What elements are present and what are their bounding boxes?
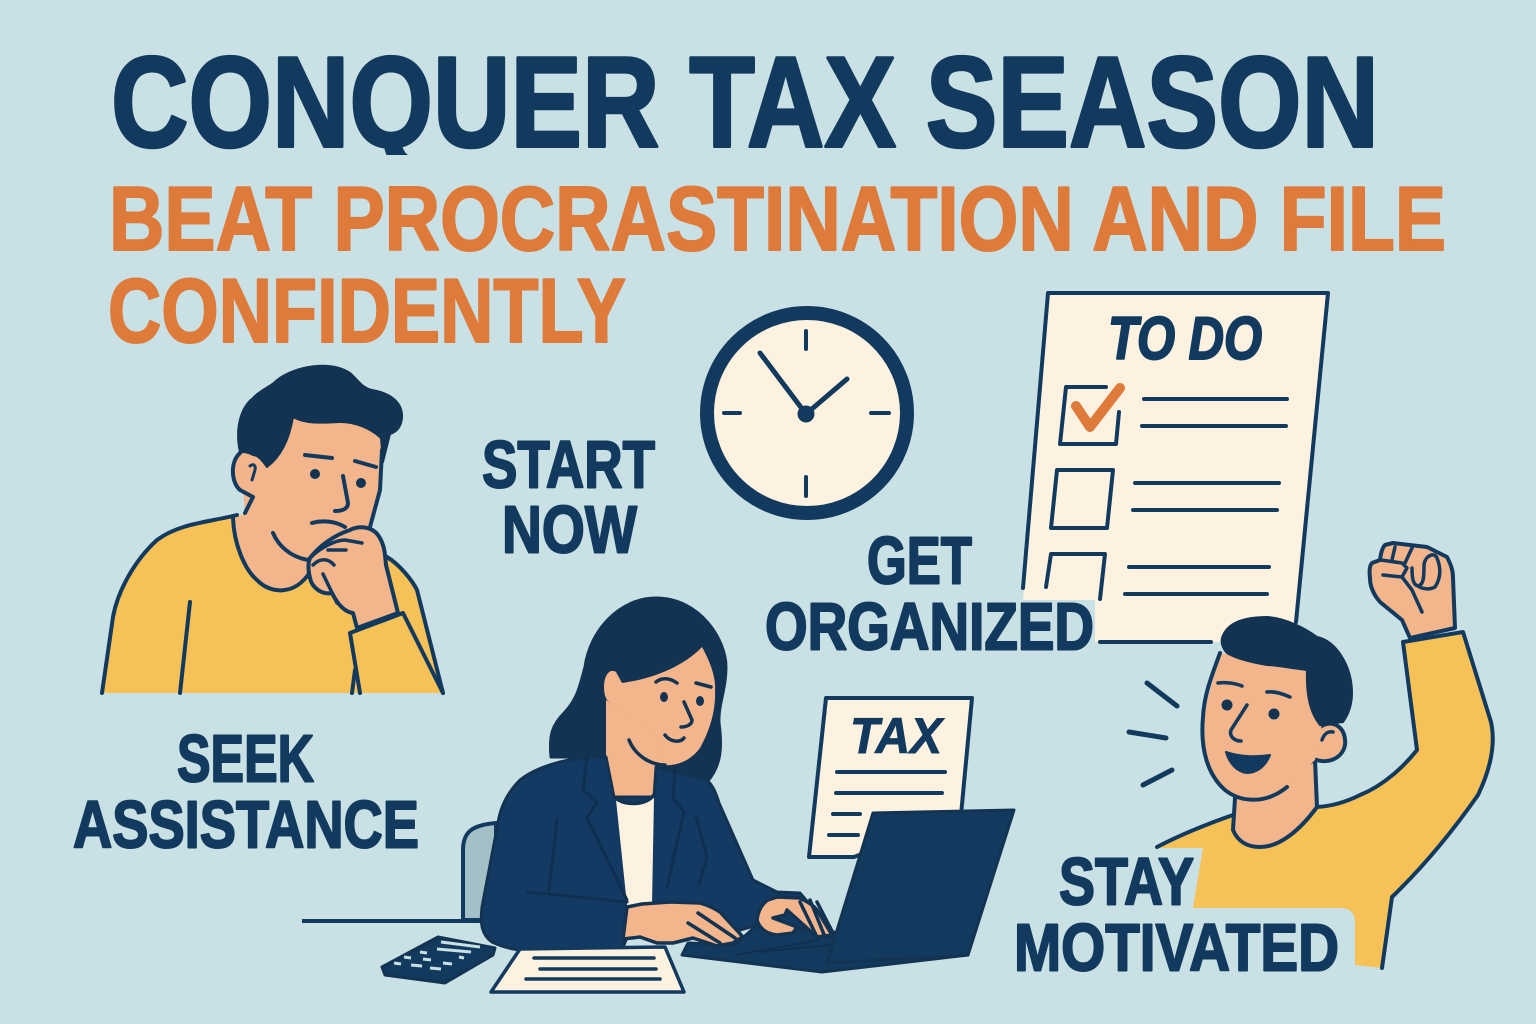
- subtitle: CONFIDENTLY: [108, 261, 626, 362]
- label: start now: START: [482, 428, 655, 502]
- desk chair: [463, 823, 496, 920]
- face and neck: [233, 410, 382, 591]
- icon: clock: [707, 313, 907, 513]
- neck: [1233, 760, 1317, 847]
- label: stay motivated: STAY: [1059, 844, 1194, 920]
- label: stay motivated: [1014, 844, 1339, 986]
- hair: [1222, 617, 1352, 725]
- checkbox 1: [1060, 387, 1119, 444]
- shirt: [616, 797, 654, 905]
- label: seek assistance: SEEK: [177, 722, 314, 796]
- character: cheering man: [1129, 543, 1493, 968]
- paper on desk: [491, 947, 684, 992]
- laptop: [682, 810, 1014, 972]
- label: get organized: ORGANIZED: [765, 590, 1094, 664]
- sleeve: [350, 613, 443, 693]
- hair: [550, 598, 726, 782]
- label: start now: NOW: [502, 492, 638, 568]
- checkbox 3: [1046, 554, 1105, 599]
- character: worried man: [102, 366, 443, 693]
- lapels: [528, 757, 707, 902]
- hands typing: [623, 897, 833, 946]
- character: woman at laptop: [481, 598, 833, 950]
- jacket: [481, 757, 833, 950]
- desk line: [302, 919, 490, 923]
- smile: [1226, 752, 1270, 773]
- raised fist: [1370, 543, 1455, 638]
- excitement marks: [1129, 683, 1177, 785]
- tax document: TAX: [850, 708, 945, 764]
- tax document: [809, 698, 972, 857]
- label: get organized: GET: [867, 524, 972, 598]
- calculator: [382, 937, 495, 983]
- ear: [1312, 724, 1345, 761]
- hair: [238, 366, 402, 467]
- sweater fill: [102, 515, 443, 693]
- checkbox 2: [1051, 470, 1113, 528]
- face: [1202, 653, 1322, 800]
- icon: orange check mark: [1076, 388, 1120, 427]
- to do heading: TO DO: [1108, 305, 1262, 372]
- hand on chin: [308, 527, 398, 628]
- label: start now: [482, 428, 655, 568]
- label: stay motivated: MOTIVATED: [1014, 910, 1339, 986]
- to do checklist: [1023, 293, 1328, 642]
- sweater: [1157, 632, 1493, 968]
- checklist lines: [1125, 399, 1287, 594]
- label: get organized: [765, 524, 1094, 664]
- label: seek assistance: [73, 722, 419, 862]
- face: [604, 647, 715, 765]
- label: seek assistance: ASSISTANCE: [73, 788, 419, 862]
- subtitle: [108, 169, 1446, 362]
- sweater outline: [102, 515, 443, 693]
